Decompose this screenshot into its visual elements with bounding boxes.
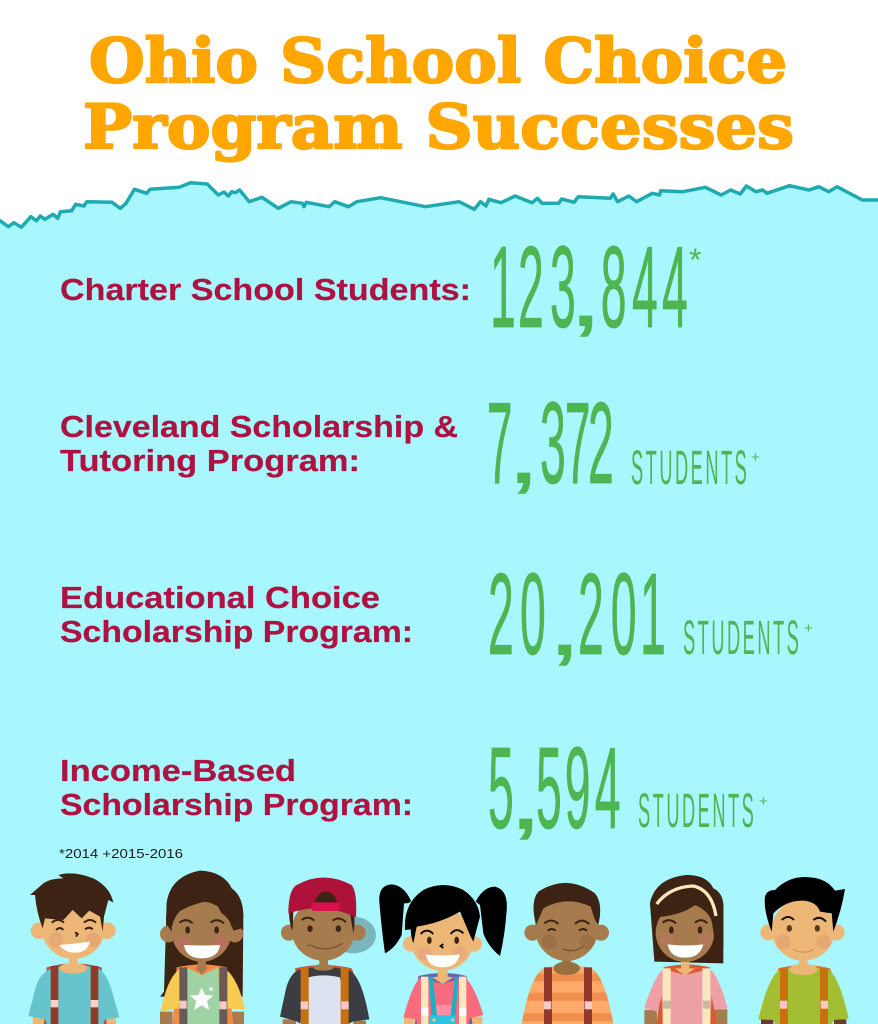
unit: students: STUDENTS bbox=[638, 783, 756, 838]
label: income-based bbox=[60, 753, 413, 822]
stat row: cleveland scholarship bbox=[60, 378, 760, 508]
label: income-based: Scholarship Program: bbox=[60, 787, 413, 822]
illustration: row of children bbox=[28, 871, 849, 1024]
number: 123,844: 844 bbox=[601, 222, 688, 352]
number: 20,201: , bbox=[552, 593, 577, 671]
child 7: boy in green shirt bbox=[758, 877, 849, 1024]
number: 20,201: 20 bbox=[488, 549, 546, 679]
number: 7,372: 372 bbox=[540, 378, 614, 508]
number: 123,844: , bbox=[573, 264, 598, 342]
number: 7,372: , bbox=[511, 421, 536, 499]
label: cleveland scholarship: Tutoring Program: bbox=[60, 443, 360, 478]
child 4: girl with black pigtails bbox=[379, 884, 507, 1024]
number: 20,201: 201 bbox=[578, 549, 666, 679]
title bbox=[83, 26, 794, 163]
number: 5,594: 5 bbox=[488, 723, 514, 853]
child 2: girl with long hair and star shirt bbox=[160, 871, 245, 1024]
stat row: charter school students bbox=[60, 222, 701, 352]
unit: students: STUDENTS bbox=[631, 440, 749, 495]
title: Program Successes bbox=[83, 92, 794, 163]
child 1: boy in teal shirt bbox=[28, 873, 119, 1024]
number: 7,372 bbox=[487, 378, 614, 508]
unit: students: STUDENTS bbox=[683, 610, 801, 665]
stat row: income-based bbox=[60, 723, 768, 853]
number: 5,594: 594 bbox=[536, 723, 621, 853]
child 5: boy in striped orange shirt bbox=[520, 883, 617, 1024]
number: 7,372: 7 bbox=[487, 378, 513, 508]
number: 5,594 bbox=[488, 723, 621, 853]
label: cleveland scholarship bbox=[60, 409, 458, 478]
label: educational choice: Scholarship Program: bbox=[60, 614, 413, 649]
footnote marker: asterisk: * bbox=[689, 242, 701, 278]
number: 123,844: 123 bbox=[490, 222, 576, 352]
label: cleveland scholarship: Cleveland Scholarship & bbox=[60, 409, 458, 444]
footnote marker: plus: + bbox=[804, 620, 813, 637]
footnote: *2014 +2015-2016 bbox=[59, 846, 183, 861]
footnote marker: plus: + bbox=[759, 793, 768, 810]
title: Ohio School Choice bbox=[89, 26, 787, 97]
number: 123,844 bbox=[490, 222, 688, 352]
child 3: boy in red backwards cap bbox=[280, 877, 376, 1024]
footnote marker: plus: + bbox=[751, 449, 760, 466]
label: educational choice: Educational Choice bbox=[60, 580, 380, 615]
stat row: educational choice bbox=[60, 549, 813, 679]
label: charter school: Charter School Students: bbox=[60, 272, 471, 307]
child 6: girl with bob and headband bbox=[644, 875, 728, 1024]
label: educational choice bbox=[60, 580, 413, 649]
number: 5,594: , bbox=[513, 767, 538, 845]
number: 20,201 bbox=[488, 549, 666, 679]
label: income-based: Income-Based bbox=[60, 753, 296, 788]
